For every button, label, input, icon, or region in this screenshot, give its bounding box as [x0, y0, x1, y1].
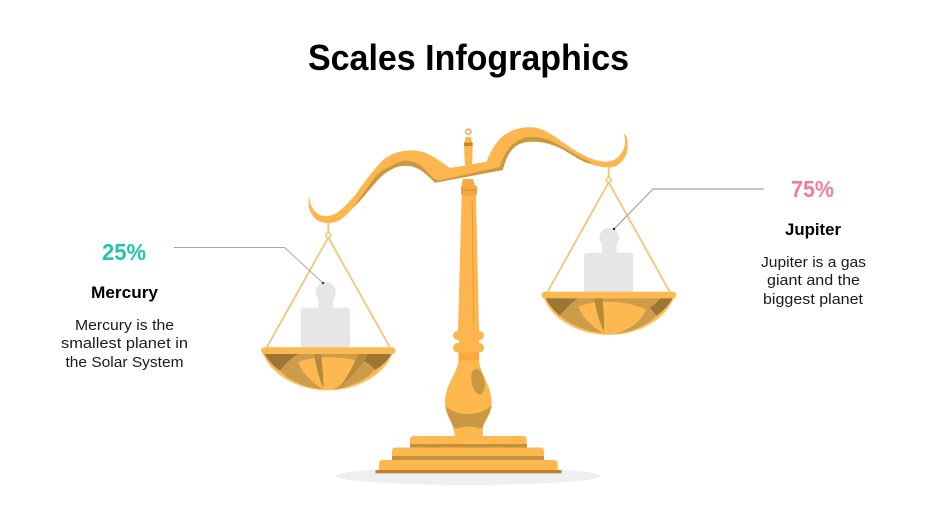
description: Mercury — [61, 318, 188, 371]
right pan — [542, 167, 676, 334]
left chain — [267, 221, 390, 348]
right bowl — [542, 292, 676, 334]
text block: Mercury — [61, 239, 188, 371]
value: 25%: 25% — [102, 239, 146, 265]
description: Mercury: the Solar System — [66, 355, 184, 371]
column and pedestal — [376, 179, 562, 473]
leader line: Mercury — [174, 248, 324, 284]
description: Mercury: smallest planet in — [61, 336, 188, 352]
heading: Jupiter: Jupiter — [785, 220, 841, 239]
heading: Mercury: Mercury — [91, 283, 159, 302]
right weight — [584, 228, 633, 295]
beam — [309, 127, 628, 223]
value: 75%: 75% — [791, 176, 834, 202]
text block: Jupiter — [761, 176, 866, 308]
illustration: balance scale — [261, 127, 676, 485]
floor shadow — [336, 467, 600, 485]
description: Jupiter: giant and the — [767, 273, 860, 289]
title: Scales Infographics — [308, 37, 629, 78]
left bowl — [261, 347, 396, 390]
left weight — [301, 282, 350, 350]
description: Jupiter: Jupiter is a gas — [761, 255, 866, 271]
description: Jupiter — [761, 255, 866, 308]
left pan — [261, 221, 396, 390]
right chain — [547, 167, 670, 292]
description: Mercury: Mercury is the — [75, 318, 174, 334]
description: Jupiter: biggest planet — [763, 292, 863, 308]
finial — [464, 129, 473, 165]
leader line: Jupiter — [613, 189, 764, 230]
